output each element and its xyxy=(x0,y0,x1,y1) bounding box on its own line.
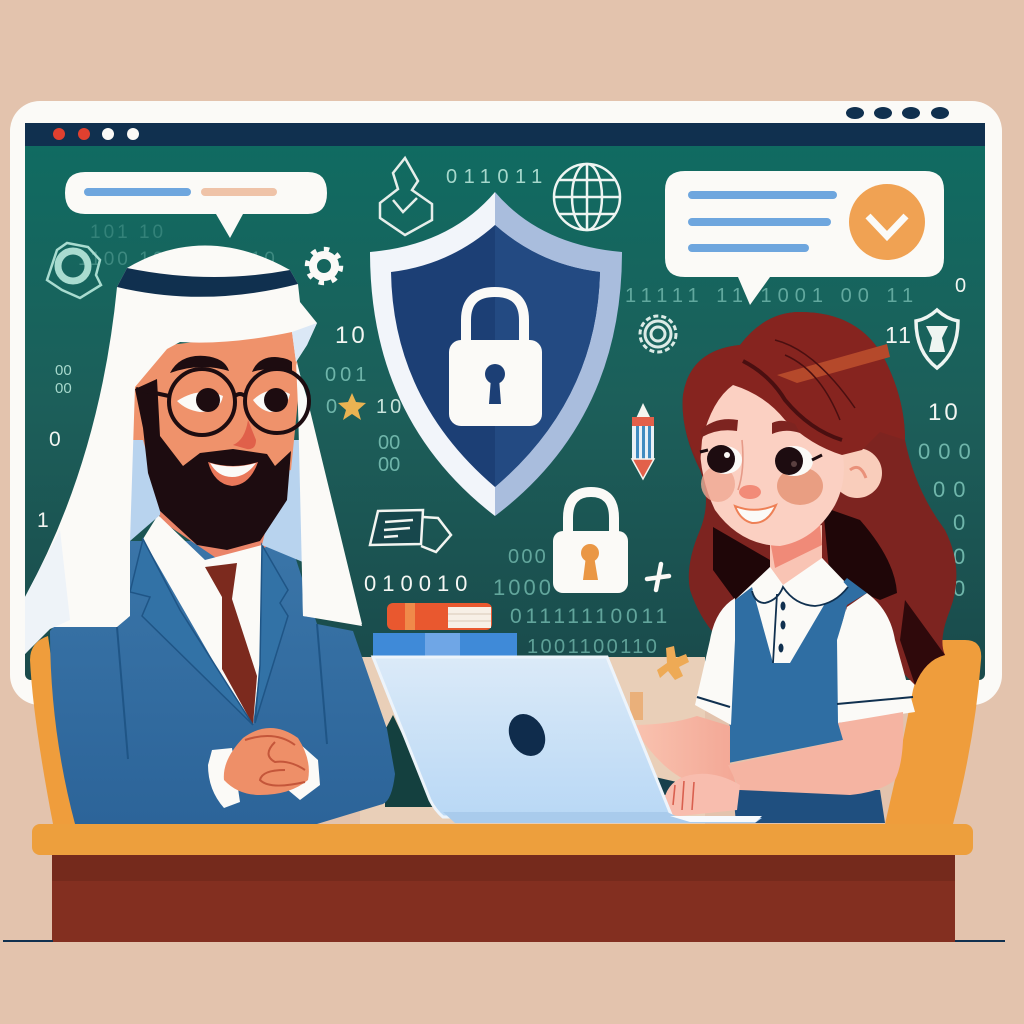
chair right xyxy=(885,640,981,824)
man shirt xyxy=(143,515,262,725)
man suit xyxy=(50,541,395,824)
binary code background: 00 xyxy=(378,454,400,476)
binary code background: 00 xyxy=(55,362,72,379)
woman buttons xyxy=(780,602,786,610)
man lapels xyxy=(130,539,253,725)
binary code background: 101 10 xyxy=(90,222,166,243)
woman left sleeve xyxy=(695,598,735,725)
man neck xyxy=(158,500,270,566)
man cuffs xyxy=(208,744,320,808)
binary code background: 10 xyxy=(928,399,961,426)
binary code background: 00 xyxy=(378,432,400,454)
woman lower vest xyxy=(733,790,885,823)
woman right sleeve xyxy=(837,593,915,723)
binary code background: 11111 11 1001 00 11 xyxy=(625,285,919,307)
desk xyxy=(32,824,973,942)
plus sign xyxy=(647,564,669,590)
binary code background: 00 xyxy=(933,477,973,502)
binary code background: 0 xyxy=(49,428,61,451)
binary code background: 01111110011 xyxy=(510,605,671,628)
man xyxy=(25,245,395,824)
woman right arm xyxy=(728,712,903,795)
binary code background: 0 xyxy=(953,510,965,535)
binary code background: 0 xyxy=(953,576,965,601)
binary code background: 1100 10 00100 10 xyxy=(78,249,278,270)
books xyxy=(373,603,517,657)
man eyebrows xyxy=(170,356,292,374)
back desk surface xyxy=(360,646,705,824)
woman left forearm xyxy=(632,716,737,787)
binary code background: 10 xyxy=(376,396,404,418)
icon: document note xyxy=(370,510,451,552)
icon: small gear xyxy=(307,249,341,283)
woman face xyxy=(700,383,844,546)
man headband xyxy=(117,268,298,297)
man headdress xyxy=(25,268,362,654)
woman vest xyxy=(728,578,867,763)
binary code background: 000 xyxy=(918,439,979,464)
large shield with padlock xyxy=(370,192,622,516)
icon: pencil xyxy=(632,403,654,479)
binary code background xyxy=(37,166,979,658)
floor line xyxy=(3,940,1005,942)
binary code background: 10 xyxy=(335,322,368,349)
man beard xyxy=(135,379,291,550)
binary code background: 011011 xyxy=(446,166,549,188)
woman eyes xyxy=(708,446,742,474)
binary code background: 11 xyxy=(885,322,913,348)
binary code background: 1 xyxy=(37,509,49,532)
man eyes xyxy=(177,392,223,412)
woman neck xyxy=(770,525,822,590)
man nose xyxy=(233,420,256,449)
icon: shield outline top xyxy=(380,158,432,235)
man face xyxy=(130,330,300,500)
woman shirt xyxy=(735,558,848,670)
binary code background: 0 xyxy=(955,275,966,297)
icon: large gear left xyxy=(47,243,101,298)
woman nose and mouth xyxy=(738,440,743,490)
woman ear xyxy=(832,448,882,498)
binary code background: 1000 xyxy=(493,575,554,600)
woman hand xyxy=(664,774,740,816)
binary code background: 000 xyxy=(508,546,548,568)
laptop xyxy=(373,657,762,823)
woman back hair xyxy=(683,312,956,685)
speech bubble right xyxy=(665,171,944,305)
binary code background: 001 xyxy=(325,364,370,386)
man glasses xyxy=(136,369,309,435)
woman eyebrows and lashes xyxy=(700,419,800,437)
small padlock xyxy=(553,492,628,593)
browser window frame xyxy=(10,101,1002,705)
man hands xyxy=(224,728,309,795)
man head top xyxy=(127,245,290,277)
binary code background: 1001100110 xyxy=(527,636,659,658)
woman front hair xyxy=(683,312,905,465)
woman cheeks xyxy=(701,466,735,502)
binary code background: 0 xyxy=(953,544,965,569)
woman inner dark hair xyxy=(713,507,897,600)
man blue headdress shadow xyxy=(130,439,310,565)
icon: globe xyxy=(554,164,620,230)
man tie xyxy=(205,563,257,725)
icon: small shield right xyxy=(916,310,958,368)
woman xyxy=(632,312,956,823)
binary code background: 010010 xyxy=(364,571,473,596)
binary code background: 00 xyxy=(55,380,72,397)
icon: gear right xyxy=(640,316,676,352)
chair left xyxy=(30,636,75,824)
woman dark shadow under arm xyxy=(655,777,690,795)
speech bubble left xyxy=(65,172,327,238)
woman collar xyxy=(752,558,848,606)
man mouth xyxy=(208,462,258,486)
icon: star xyxy=(338,393,366,420)
binary code background: 0 xyxy=(326,396,337,418)
